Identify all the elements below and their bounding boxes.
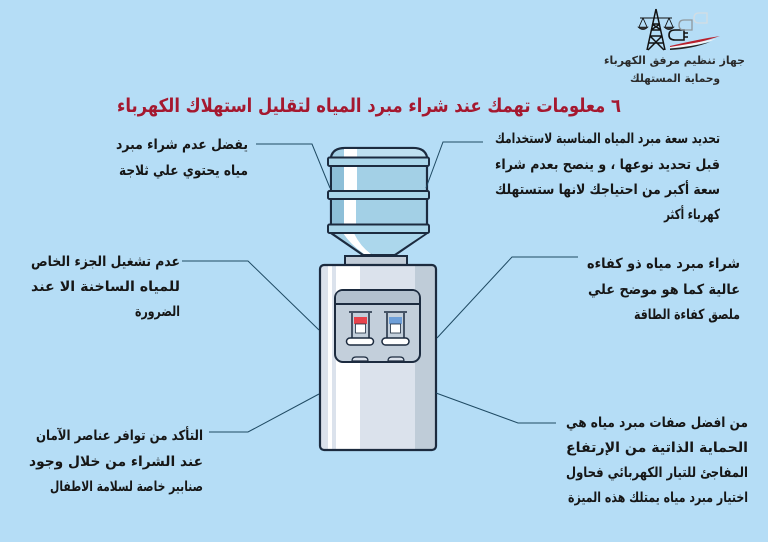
cooler body: [320, 265, 436, 450]
drip trays: [352, 357, 404, 361]
logo text: وحماية المستهلك: [630, 72, 720, 85]
logo: electricity regulator: [604, 9, 745, 85]
text block: capacity: قبل تحديد نوعها ، و ينصح بعدم شراء: [495, 157, 720, 173]
dispenser panel: [335, 290, 420, 362]
text block: hot water: للمياه الساخنة الا عند: [31, 279, 180, 295]
neck: [345, 256, 407, 265]
water bottle: [328, 148, 429, 255]
icon: pylon with scales: [638, 9, 674, 50]
text block: capacity: سعة أكبر من احتياجك لانها ستستهلك: [495, 180, 720, 198]
icon: flag swoosh: [670, 36, 720, 50]
text block: hot water: عدم تشغيل الجزء الخاص: [31, 254, 180, 270]
text block: efficiency: عالية كما هو موضح علي: [588, 282, 740, 298]
illustration: water cooler: [320, 148, 436, 450]
leader lines: [182, 142, 578, 432]
text block: hot water: الضرورة: [135, 304, 180, 320]
logo text: جهاز تنظيم مرفق الكهرباء: [604, 54, 745, 67]
text block: no fridge: [116, 137, 248, 180]
text block: capacity: [495, 131, 721, 223]
text block: safety: التأكد من توافر عناصر الآمان: [36, 426, 203, 444]
text block: efficiency: ملصق كفاءة الطاقة: [634, 307, 740, 323]
title: ٦ معلومات تهمك عند شراء مبرد المياه لتقليل استهلاك الكهرباء: [117, 95, 621, 117]
text block: efficiency: شراء مبرد مياه ذو كفاءه: [587, 256, 740, 272]
text block: hot water: [31, 254, 180, 320]
text block: capacity: كهرباء أكثر: [663, 205, 721, 223]
text block: no fridge: يفضل عدم شراء مبرد: [116, 137, 248, 153]
hot tap: [346, 312, 374, 345]
text block: protection: الحماية الذاتية من الإرتفاع: [566, 440, 748, 456]
text block: no fridge: مياه يحتوي علي ثلاجة: [119, 163, 248, 180]
icon: plugs: [669, 13, 707, 40]
text block: protection: [566, 415, 748, 506]
text block: safety: [29, 426, 203, 495]
text block: safety: عند الشراء من خلال وجود: [29, 454, 203, 470]
cold tap: [382, 312, 409, 345]
text block: efficiency: [587, 256, 740, 323]
logo text: [604, 54, 745, 85]
text block: safety: صنابير خاصة لسلامة الاطفال: [50, 479, 203, 495]
